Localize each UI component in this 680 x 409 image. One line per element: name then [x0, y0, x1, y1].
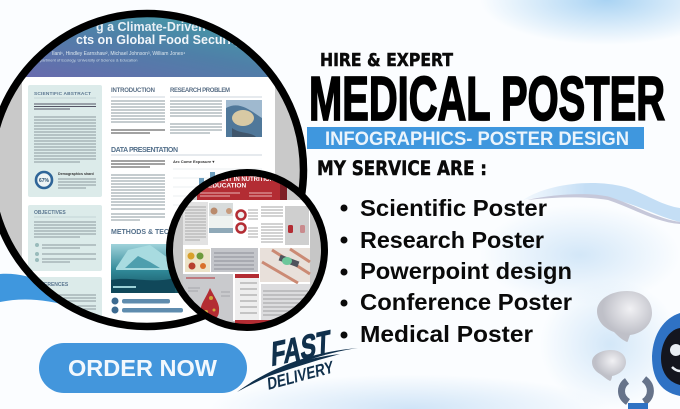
progress bars	[112, 298, 183, 314]
poster sheet	[22, 77, 275, 323]
fast delivery badge: DELIVERY	[267, 356, 334, 394]
donut 67%: 67%	[39, 178, 50, 184]
services heading: MY SERVICE ARE :	[317, 157, 487, 180]
red header	[197, 176, 287, 200]
services list: Research Poster	[360, 227, 544, 253]
section: methods and image	[111, 229, 183, 314]
section: introduction: INTRODUCTION	[111, 88, 155, 94]
eyebrow heading: HIRE & EXPERT	[320, 51, 453, 71]
panel: references: REFERENCES	[34, 282, 69, 288]
photo: vegetables	[185, 249, 210, 272]
services list: Scientific Poster	[360, 195, 547, 221]
chart	[173, 169, 262, 208]
section: data presentation: Arc Come Exposure ▾	[173, 159, 215, 164]
section: methods and image: METHODS & TECHNIQUES	[111, 229, 201, 236]
column 1 text	[183, 202, 208, 245]
services list: Conference Poster	[360, 289, 572, 315]
panel: scientific abstract: SCIENTIFIC ABSTRACT	[34, 91, 91, 97]
photo: polar bear	[226, 100, 262, 137]
services list: Powerpoint design	[360, 258, 572, 284]
poster header band	[26, 17, 268, 77]
icons: bottles	[288, 225, 305, 233]
large circular poster preview	[0, 10, 310, 330]
lower right text	[261, 284, 310, 320]
grey panel with blood drop	[183, 274, 233, 321]
panel: objectives	[28, 205, 102, 271]
speech bubbles	[592, 291, 652, 381]
list panel	[235, 274, 270, 324]
order now button	[39, 343, 247, 393]
services list: Medical Poster	[360, 321, 533, 347]
photo: clinicians	[209, 203, 233, 233]
poster header band: cts on Global Food Security	[76, 33, 242, 47]
section: introduction	[111, 88, 165, 133]
subtitle banner: INFOGRAPHICS- POSTER DESIGN	[325, 129, 629, 150]
red header: IMPROVEMENT IN NUTRITION &	[187, 177, 281, 183]
small circular poster preview	[165, 170, 330, 335]
order now button: ORDER NOW	[68, 355, 217, 381]
panel: scientific abstract: Demographics shard	[58, 172, 94, 176]
red header: EDUCATION	[208, 182, 246, 190]
section: research problem	[170, 88, 262, 137]
panel: objectives: OBJECTIVES	[34, 210, 66, 216]
poster header band: g a Climate-Driven	[96, 20, 206, 34]
poster header band: Ilani¹, Hindley Earnshaw², Michael Johnson³, William Jones⁴	[52, 51, 185, 57]
section: data presentation: DATA PRESENTATION	[111, 147, 178, 154]
icon: robot mascot	[622, 313, 680, 409]
section: data presentation	[111, 147, 262, 220]
fast delivery badge	[237, 324, 358, 394]
fast delivery badge: FAST	[271, 324, 331, 374]
services list	[340, 195, 572, 347]
panel: scientific abstract	[28, 85, 102, 197]
grey panel	[211, 248, 258, 272]
panel: references	[38, 277, 102, 316]
donut charts	[236, 210, 246, 232]
photo: clipboard and highlighter	[260, 248, 310, 283]
poster header band: partment of Ecology, University of Science & Education	[40, 58, 138, 62]
section: research problem: RESEARCH PROBLEM	[170, 88, 230, 94]
